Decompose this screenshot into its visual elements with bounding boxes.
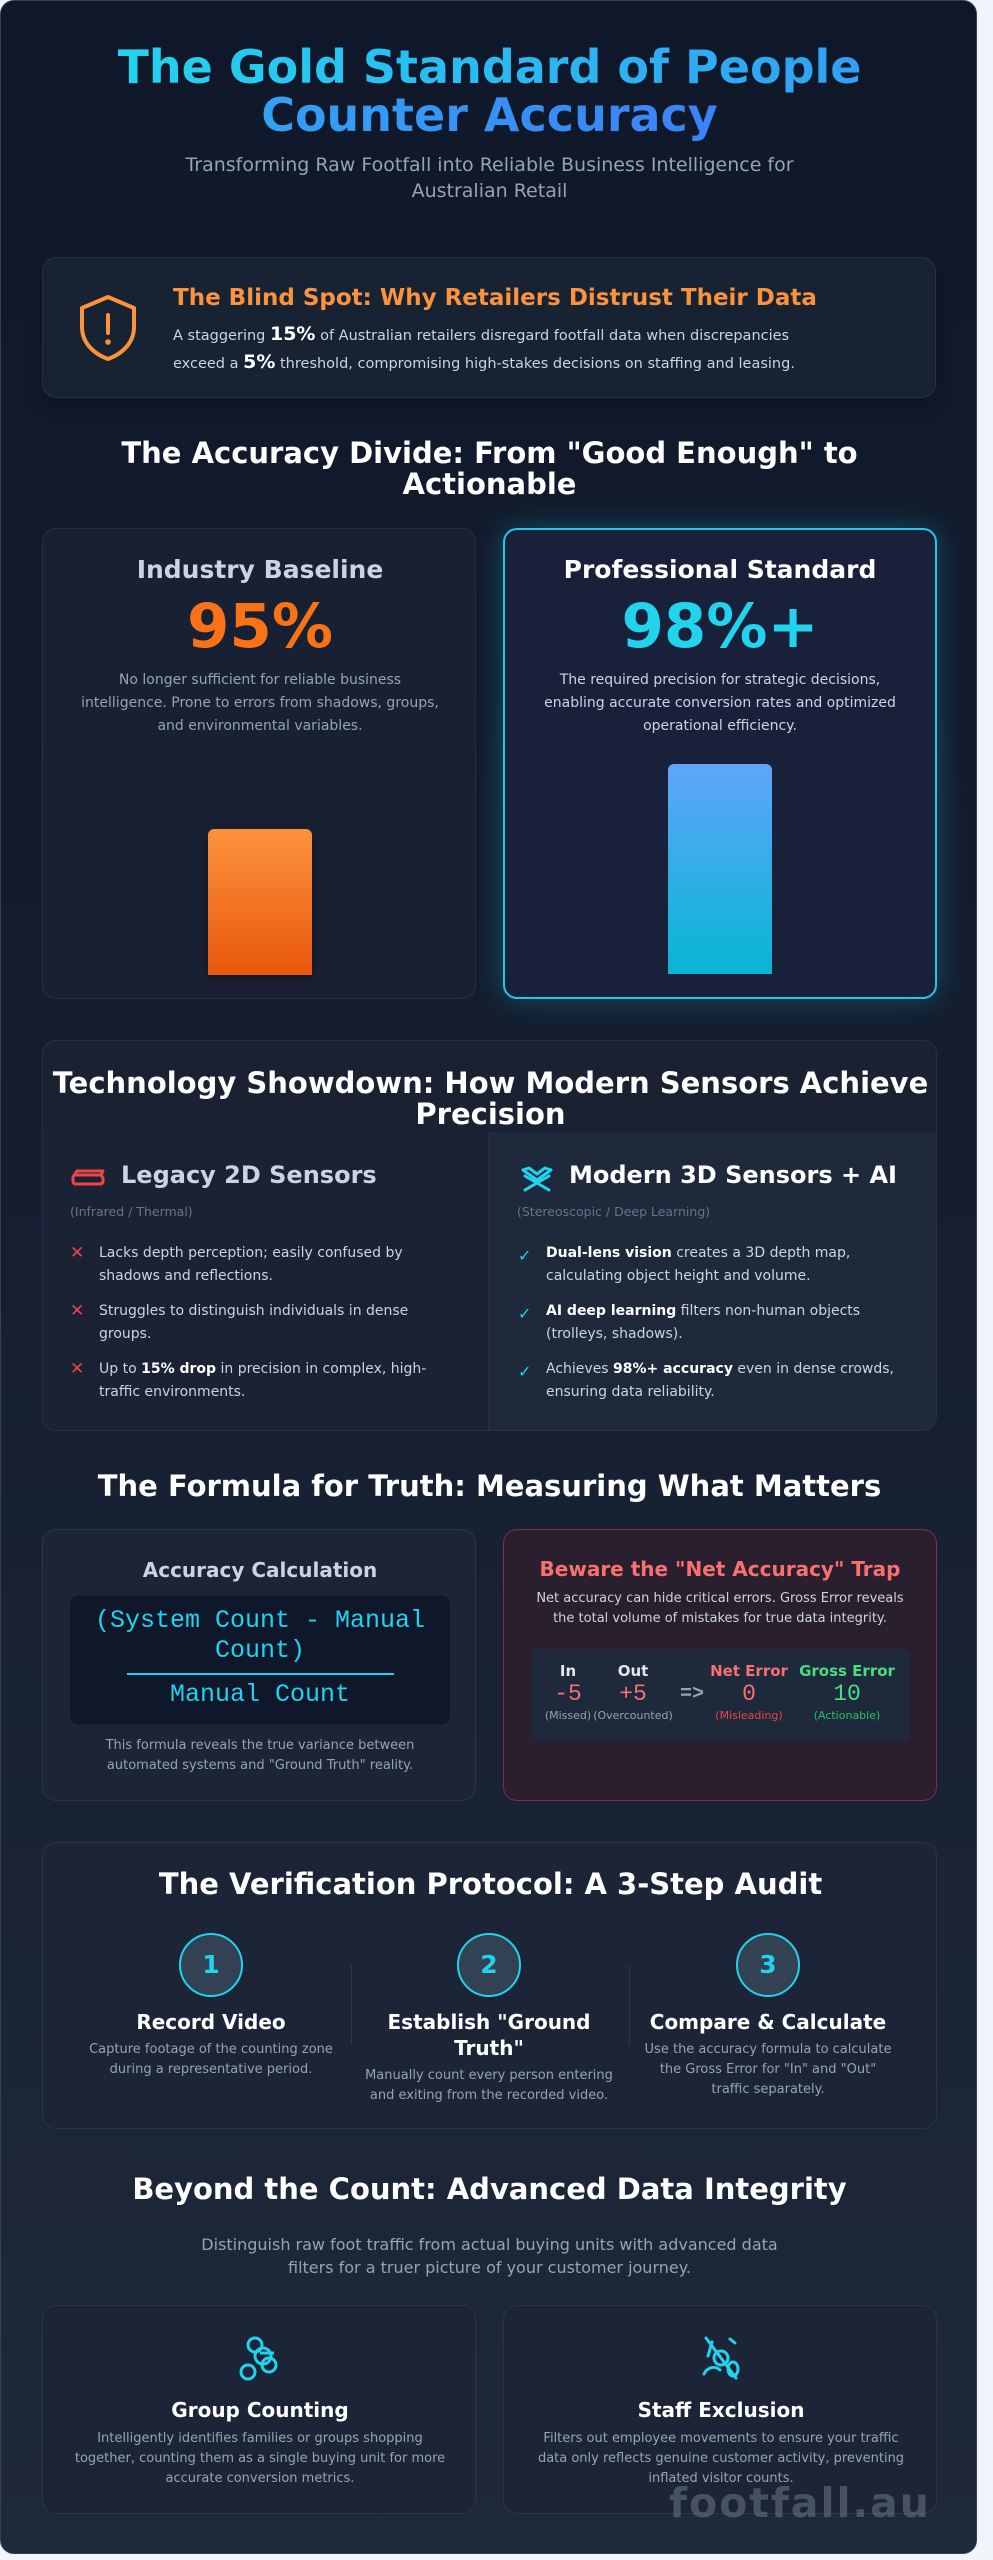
panel: net accuracy trap (503, 1529, 937, 1801)
panel: accuracy calculation (42, 1529, 476, 1801)
column: net error (710, 1662, 788, 1722)
description: The required precision for strategic decisions, (560, 672, 880, 688)
step title: Record Video (136, 2010, 286, 2034)
icon: group (240, 2336, 278, 2380)
description (81, 672, 439, 734)
column subtitle: (Infrared / Thermal) (70, 1204, 193, 1219)
column: in: (Missed) (545, 1709, 591, 1722)
bullet list: strengths: Achieves 98%+ accuracy even in dense crowds, (546, 1361, 894, 1377)
description: intelligence. Prone to errors from shadows, groups, (81, 695, 439, 711)
step title: Establish "Ground Truth" (388, 2010, 590, 2060)
bullet list: strengths: AI deep learning filters non-human objects (546, 1303, 860, 1319)
heading: The Verification Protocol: A 3-Step Audit (159, 1867, 822, 1901)
stat 98%+: 98%+ (621, 591, 819, 662)
heading: accuracy divide (121, 436, 858, 501)
card text: Intelligently identifies families or groups shopping together, counting them as a single buying unit for more accurate conversion metrics. (75, 2431, 445, 2486)
step number circle (179, 1933, 243, 1997)
column: in: -5 (554, 1681, 582, 1707)
heading (52, 1066, 928, 1131)
heading: Technology Showdown: How Modern Sensors Achieve (53, 1066, 928, 1100)
watermark: footfall.au (669, 2479, 931, 2527)
column: out: +5 (619, 1681, 647, 1707)
description: operational efficiency. (643, 718, 797, 734)
column: legacy 2D (43, 1132, 489, 1432)
column subtitle: (Stereoscopic / Deep Learning) (517, 1204, 710, 1219)
intro text: Distinguish raw foot traffic from actual buying units with advanced data (201, 2235, 778, 2254)
footnote: automated systems and "Ground Truth" reality. (107, 1758, 413, 1773)
heading: beyond the count: Beyond the Count: Advanced Data Integrity (132, 2172, 847, 2206)
title: The Gold Standard of People (118, 40, 861, 94)
panel: verification protocol (42, 1842, 937, 2129)
formula denominator: Manual Count (170, 1680, 350, 1709)
column: in: In (560, 1662, 576, 1680)
bullet list: weaknesses (70, 1243, 426, 1400)
bullet list: weaknesses: Struggles to distinguish individuals in dense (99, 1303, 408, 1319)
card heading: Industry Baseline (137, 555, 383, 584)
column: out: Out (618, 1662, 648, 1680)
bullet list: strengths: (trolleys, shadows). (546, 1326, 683, 1342)
step text: Capture footage of the counting zone during a representative period. (89, 2042, 333, 2077)
step number circle: 1 (202, 1950, 220, 1979)
column: gross error: 10 (833, 1681, 861, 1707)
step 1 (89, 1933, 333, 2077)
subtitle: Transforming Raw Footfall into Reliable Business Intelligence for (185, 154, 794, 176)
alert text (173, 323, 795, 373)
description: enabling accurate conversion rates and optimized (544, 695, 896, 711)
panel: group counting (42, 2305, 476, 2514)
step 2 (365, 1933, 613, 2103)
bullet list: weaknesses: traffic environments. (99, 1384, 245, 1400)
alert text: exceed a 5% threshold, compromising high-stakes decisions on staffing and leasing. (173, 351, 795, 373)
description (544, 672, 896, 734)
heading: Precision (415, 1097, 566, 1131)
bar: 98%+ (668, 764, 772, 974)
bullet list: weaknesses: ✕ (70, 1301, 84, 1321)
panel: technology showdown (42, 1040, 937, 1431)
column: gross error: (Actionable) (814, 1709, 880, 1722)
icon: legacy sensor (72, 1170, 104, 1186)
column: in (545, 1662, 591, 1722)
step title: Compare & Calculate (650, 2010, 886, 2034)
bullet list: strengths: Dual-lens vision creates a 3D depth map, (546, 1245, 850, 1261)
bar: 95% (208, 829, 312, 975)
heading: accuracy divide: Actionable (403, 467, 576, 501)
panel: professional standard (503, 528, 937, 999)
bullet list: weaknesses: Lacks depth perception; easily confused by (99, 1245, 403, 1261)
card heading: Professional Standard (564, 555, 876, 584)
subtitle (185, 154, 794, 202)
step number circle (736, 1933, 800, 1997)
bullet list: weaknesses: shadows and reflections. (99, 1268, 273, 1284)
card text: Filters out employee movements to ensure your traffic data only reflects genuine customer activity, preventing inflated visitor counts. (538, 2431, 904, 2486)
card title: Staff Exclusion (638, 2398, 804, 2422)
heading: formula for truth: The Formula for Truth: Measuring What Matters (98, 1469, 881, 1503)
column heading: Modern 3D Sensors + AI (569, 1161, 897, 1189)
step 3 (645, 1933, 891, 2097)
alert heading: The Blind Spot: Why Retailers Distrust Their Data (173, 285, 817, 311)
step number circle: 2 (480, 1950, 498, 1979)
column: gross error (799, 1662, 895, 1722)
column: out (593, 1662, 673, 1722)
step number circle (457, 1933, 521, 1997)
bullet list: weaknesses: groups. (99, 1326, 151, 1342)
alert panel: blind spot (42, 257, 936, 398)
bullet list: strengths: ✓ (518, 1304, 531, 1323)
bullet list: strengths: calculating object height and volume. (546, 1268, 811, 1284)
formula box (70, 1596, 450, 1724)
bullet list: weaknesses: ✕ (70, 1359, 84, 1379)
bullet list: strengths: ✓ (518, 1362, 531, 1381)
description: No longer sufficient for reliable business (119, 672, 401, 688)
stat 95%: 95% (187, 591, 333, 662)
formula numerator (95, 1606, 425, 1665)
formula numerator: Count) (215, 1636, 305, 1665)
heading: accuracy divide: The Accuracy Divide: From "Good Enough" to (121, 436, 858, 470)
column: net error: 0 (742, 1681, 756, 1707)
step text: Manually count every person entering and exiting from the recorded video. (365, 2068, 613, 2103)
bullet list: strengths: ensuring data reliability. (546, 1384, 715, 1400)
title: Counter Accuracy (261, 88, 718, 142)
column: out: (Overcounted) (593, 1709, 673, 1722)
fraction rule (127, 1673, 394, 1675)
footnote: This formula reveals the true variance between (106, 1738, 414, 1753)
alert text: A staggering 15% of Australian retailers disregard footfall data when discrepancies (173, 323, 789, 345)
icon: staff exclusion (702, 2336, 740, 2380)
bullet list: weaknesses: Up to 15% drop in precision in complex, high- (99, 1361, 426, 1377)
bullet list: weaknesses: ✕ (70, 1243, 84, 1263)
step text: Use the accuracy formula to calculate the Gross Error for "In" and "Out" traffic separately. (645, 2042, 891, 2097)
comparison table (532, 1649, 910, 1742)
formula numerator: (System Count - Manual (95, 1606, 425, 1635)
footnote (106, 1738, 414, 1773)
card heading: Beware the "Net Accuracy" Trap (540, 1557, 900, 1581)
panel: staff exclusion (503, 2305, 937, 2514)
icon: 3D sensor (521, 1166, 553, 1192)
column: net error: Net Error (710, 1662, 788, 1680)
bullet list: strengths: ✓ (518, 1246, 531, 1265)
column heading: Legacy 2D Sensors (121, 1161, 377, 1189)
column: gross error: Gross Error (799, 1662, 895, 1680)
title (118, 40, 861, 142)
subtitle: Australian Retail (412, 180, 567, 202)
description: and environmental variables. (157, 718, 363, 734)
column: modern 3D (489, 1132, 938, 1432)
card heading: Accuracy Calculation (143, 1558, 377, 1582)
panel: industry baseline (42, 528, 476, 999)
icon: shield warning (80, 295, 136, 361)
bullet list: strengths (518, 1245, 894, 1400)
column: net error: (Misleading) (715, 1709, 783, 1722)
description: Net accuracy can hide critical errors. Gross Error reveals the total volume of mistakes for true data integrity. (536, 1591, 904, 1626)
intro text: filters for a truer picture of your customer journey. (288, 2258, 691, 2277)
intro text (201, 2235, 778, 2277)
arrow: => (680, 1683, 704, 1706)
step number circle: 3 (759, 1950, 777, 1979)
card title: Group Counting (171, 2398, 349, 2422)
